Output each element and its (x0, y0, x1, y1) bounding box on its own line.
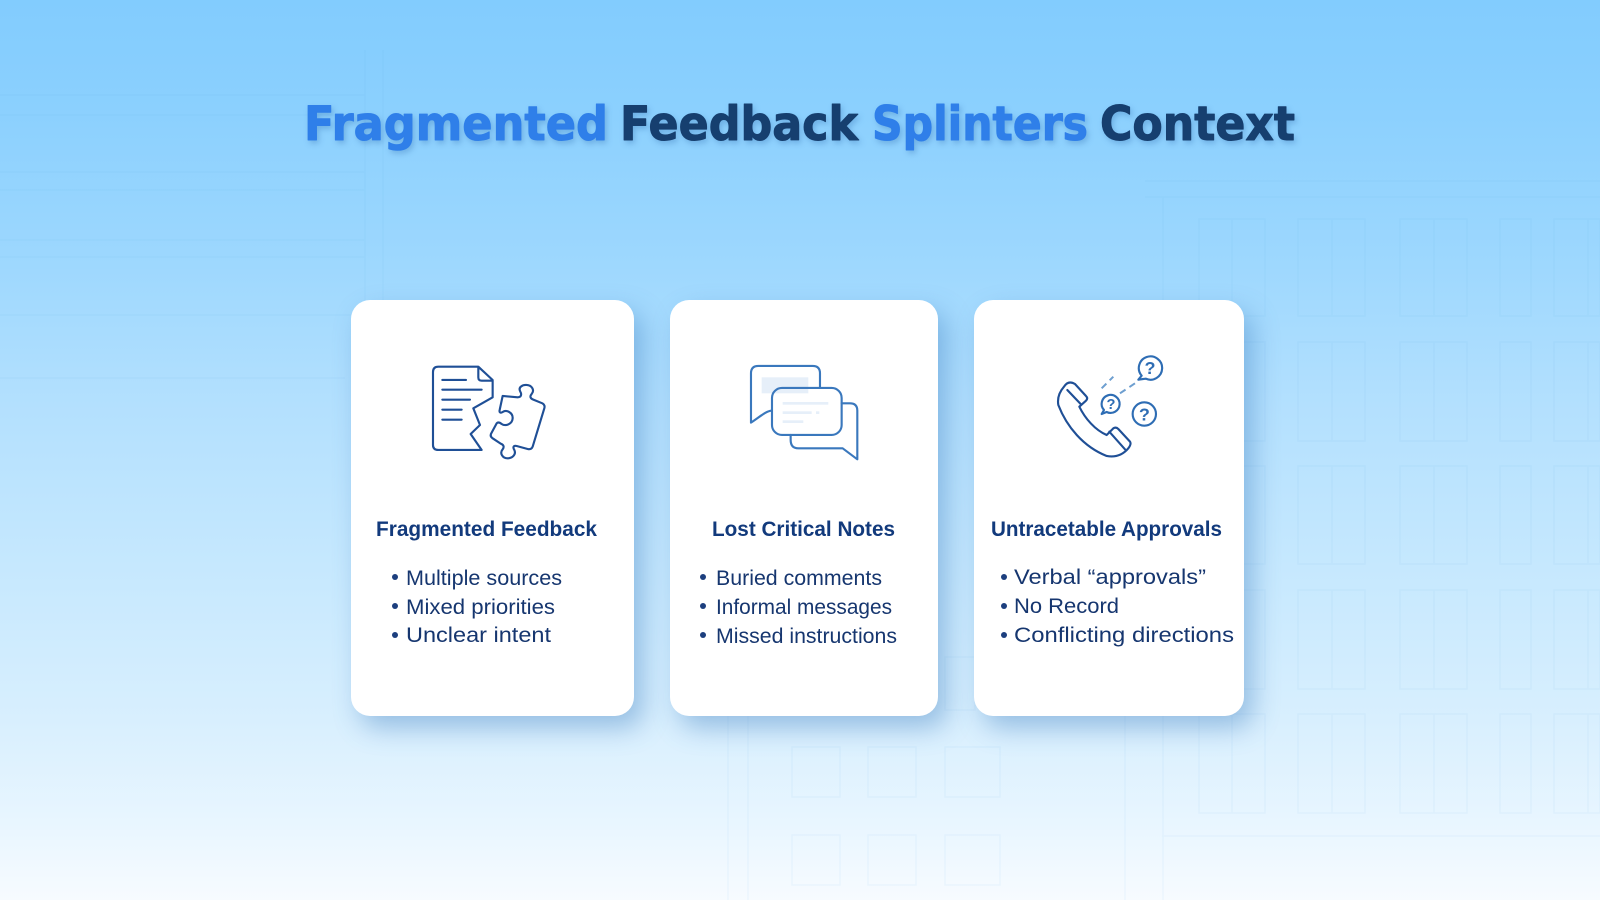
bullet list: Unclear intent (406, 624, 551, 647)
bullet list: Buried comments (716, 567, 882, 590)
bullet list: Missed instructions (716, 625, 897, 648)
bullet list: Conflicting directions (1014, 624, 1234, 647)
panel: fragmented feedback (351, 300, 634, 716)
title: Fragmented (304, 97, 608, 152)
panel: lost critical notes (670, 300, 938, 716)
title: Feedback (620, 97, 860, 152)
bullet list: Verbal “approvals” (1014, 566, 1206, 589)
icon: phone with question bubbles: ? (1107, 397, 1116, 413)
icon: overlapping chat bubbles (751, 366, 857, 459)
bullet list: No Record (1014, 595, 1119, 618)
icon: phone with question bubbles: ? (1144, 358, 1155, 378)
card heading: Untracetable Approvals (991, 518, 1222, 541)
bullet list (392, 567, 562, 647)
bullet list: Informal messages (716, 596, 892, 619)
icon: phone with question bubbles (1058, 356, 1162, 456)
bullet list (1001, 566, 1234, 647)
icon: phone with question bubbles: ? (1139, 404, 1150, 424)
title: Context (1100, 97, 1295, 152)
bullet list: Mixed priorities (406, 596, 555, 619)
title (304, 97, 1298, 156)
bullet list: Multiple sources (406, 567, 562, 590)
card heading: Fragmented Feedback (376, 518, 597, 541)
icon: torn document and puzzle piece (433, 367, 545, 458)
card heading: Lost Critical Notes (712, 518, 895, 541)
panel: untracetable approvals (974, 300, 1244, 716)
title: Splinters (872, 97, 1088, 152)
bullet list (700, 567, 897, 648)
